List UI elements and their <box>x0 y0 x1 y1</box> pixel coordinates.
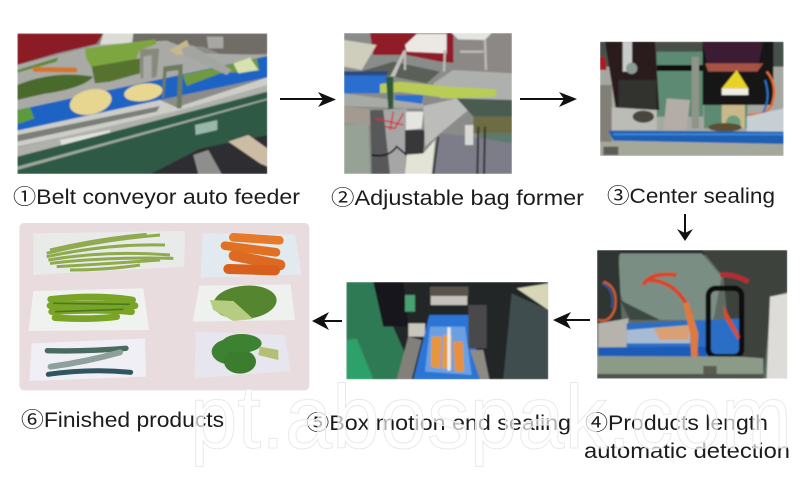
photo 3: center sealing <box>600 42 784 156</box>
product: lettuce bag <box>193 283 295 322</box>
product: green beans bag <box>33 231 185 275</box>
arrow: step 1 to 2 <box>280 92 336 107</box>
caption: step 2: ②Adjustable bag former <box>331 187 584 210</box>
photo 1: belt conveyor auto feeder <box>17 33 267 174</box>
photo 5: box motion end sealing <box>346 282 548 379</box>
caption: step 5: ⑤Box motion end sealing <box>306 412 571 435</box>
arrow: step 4 to 5 <box>553 312 590 329</box>
caption: step 6: ⑥Finished products <box>21 409 224 432</box>
photo 4: products length detection <box>597 250 787 379</box>
product: pepper bag <box>29 288 149 331</box>
arrow: step 2 to 3 <box>520 92 577 107</box>
photo 2: adjustable bag former <box>344 33 512 174</box>
product: cucumber bag <box>29 338 146 381</box>
caption: step 3: ③Center sealing <box>607 185 775 208</box>
caption: step 1: ①Belt conveyor auto feeder <box>13 186 300 209</box>
arrow: step 5 to 6 <box>312 312 342 330</box>
product: carrots bag <box>201 233 302 278</box>
caption: step 4 second line: automatic detection <box>584 440 790 463</box>
caption: step 4: ④Products length <box>585 412 768 435</box>
product: spinach bag <box>195 332 291 378</box>
arrow: step 3 to 4 <box>677 214 693 241</box>
panel: finished products <box>19 223 309 390</box>
